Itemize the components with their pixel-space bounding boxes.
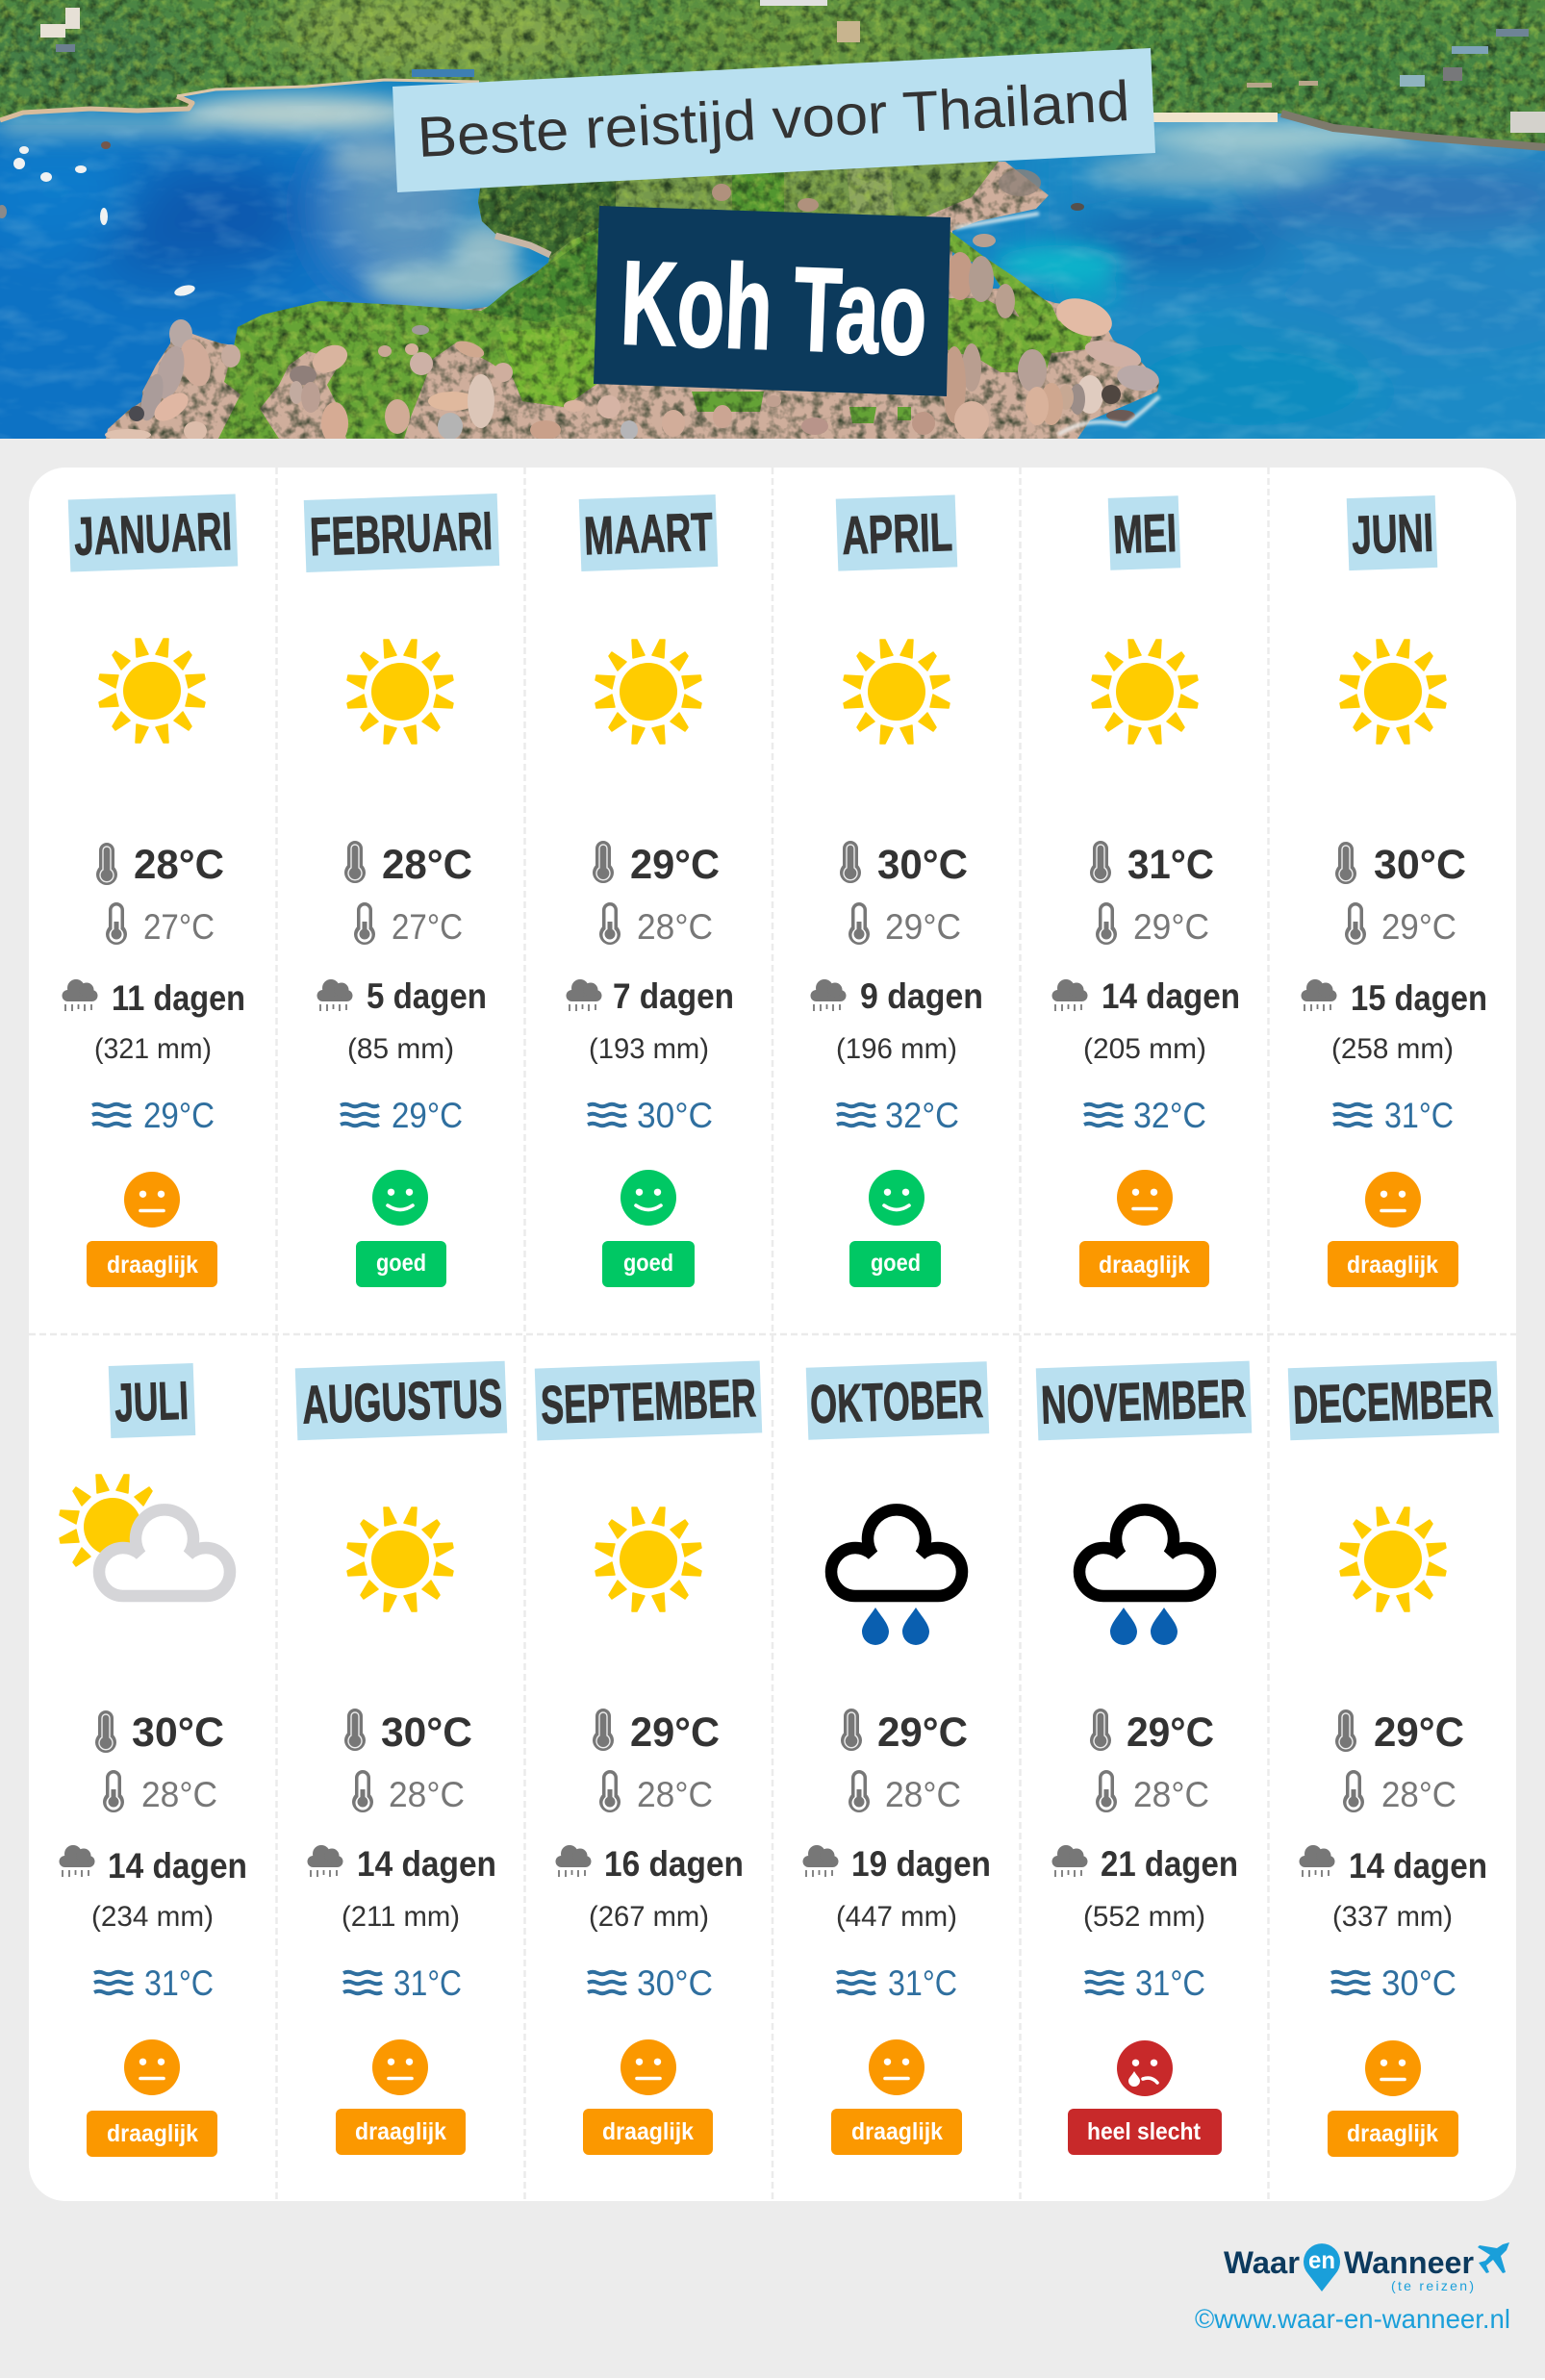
badge xyxy=(1328,1241,1458,1287)
rain days: 14 dagen xyxy=(357,1844,496,1884)
rainfall: (196 mm) xyxy=(836,1033,957,1065)
panel: oktober xyxy=(802,1361,991,2155)
rain days xyxy=(60,1845,247,1886)
high temperature xyxy=(593,1709,720,1756)
high temperature xyxy=(840,841,968,888)
high temperature: 30°C xyxy=(132,1709,224,1756)
smiley xyxy=(1117,1170,1173,1226)
tree texture xyxy=(0,0,1545,439)
rain days xyxy=(802,1844,991,1884)
high temperature xyxy=(1090,1709,1214,1756)
low temperature xyxy=(354,902,463,947)
low temperature: 28°C xyxy=(1133,1775,1209,1814)
rain days xyxy=(556,1844,744,1884)
sea temperature: 32°C xyxy=(885,1096,959,1135)
smiley xyxy=(621,1170,676,1226)
sea temperature xyxy=(1084,1096,1206,1135)
sea temperature: 31°C xyxy=(888,1963,957,2003)
low temperature xyxy=(1096,1770,1209,1814)
smiley xyxy=(124,2039,180,2095)
icon: sun xyxy=(1340,640,1446,744)
low temperature xyxy=(848,902,961,947)
heading: november xyxy=(1036,1361,1252,1440)
low temperature xyxy=(1345,902,1456,947)
sea temperature xyxy=(341,1096,463,1135)
icon: sun xyxy=(347,1507,453,1611)
panel: calendar card xyxy=(29,468,1516,2201)
badge xyxy=(602,1241,695,1287)
rain days xyxy=(1052,1844,1238,1884)
rain days xyxy=(810,976,983,1016)
sea temperature xyxy=(343,1963,462,2003)
heading: oktober: OKTOBER xyxy=(809,1368,984,1434)
smiley xyxy=(1365,2040,1421,2096)
icon: rain cloud xyxy=(831,1509,962,1645)
sea temperature xyxy=(92,1096,215,1135)
panel: november xyxy=(1036,1361,1252,2155)
high temperature: 28°C xyxy=(382,842,472,888)
boulders xyxy=(105,169,1161,444)
badge xyxy=(831,2109,962,2155)
rain days xyxy=(62,978,245,1018)
badge xyxy=(336,2109,466,2155)
sea temperature: 30°C xyxy=(637,1963,713,2003)
badge xyxy=(583,2109,713,2155)
high temperature: 29°C xyxy=(1374,1709,1464,1756)
boats xyxy=(0,141,196,298)
high temperature xyxy=(344,1709,472,1756)
low temperature xyxy=(352,1770,465,1814)
badge: draaglijk xyxy=(602,2118,694,2145)
rain days: 16 dagen xyxy=(604,1844,744,1884)
low temperature: 29°C xyxy=(1381,907,1456,947)
sea temperature xyxy=(837,1096,959,1135)
high temperature: 31°C xyxy=(1127,842,1214,888)
rainfall: (321 mm) xyxy=(94,1033,212,1065)
rain days xyxy=(1052,976,1240,1016)
low temperature xyxy=(848,1770,961,1814)
badge: draaglijk xyxy=(107,1252,198,1279)
sea temperature xyxy=(588,1963,713,2003)
rainfall: (267 mm) xyxy=(589,1901,709,1933)
rain days: 7 dagen xyxy=(613,976,734,1016)
low temperature: 27°C xyxy=(392,907,463,947)
high temperature: 30°C xyxy=(1374,842,1466,888)
high temperature xyxy=(841,1709,968,1756)
rainfall: (85 mm) xyxy=(347,1033,454,1065)
heading: april: APRIL xyxy=(841,501,953,566)
rain days xyxy=(308,1844,496,1884)
rainfall: (447 mm) xyxy=(836,1901,957,1933)
rainfall: (258 mm) xyxy=(1331,1033,1454,1065)
sea temperature: 29°C xyxy=(392,1096,463,1135)
heading: februari: FEBRUARI xyxy=(309,500,494,567)
island rock base xyxy=(106,162,1159,439)
sea temperature: 31°C xyxy=(1135,1963,1205,2003)
rain days: 21 dagen xyxy=(1101,1844,1238,1884)
bottom strip xyxy=(0,2378,1545,2380)
smiley xyxy=(1365,1172,1421,1228)
icon: map pin xyxy=(1304,2243,1340,2291)
sea temperature xyxy=(1333,1096,1454,1135)
icon: sun behind cloud xyxy=(60,1475,230,1596)
panel: mei xyxy=(1052,495,1240,1287)
high temperature xyxy=(96,842,224,888)
panel: maart xyxy=(566,494,734,1287)
panel: juli xyxy=(60,1363,247,2157)
logo: Waar en Wanneer: (te reizen) xyxy=(1391,2278,1474,2293)
rainfall: (205 mm) xyxy=(1083,1033,1206,1065)
smiley xyxy=(124,1172,180,1228)
forest hillside xyxy=(0,0,1545,143)
high temperature: 29°C xyxy=(1127,1709,1214,1756)
icon: sun xyxy=(844,640,950,744)
high temperature xyxy=(593,841,720,888)
badge xyxy=(1328,2111,1458,2157)
heading: maart xyxy=(579,494,718,571)
logo: Waar en Wanneer xyxy=(1224,2242,1509,2293)
heading: augustus xyxy=(295,1361,507,1440)
rain days: 14 dagen xyxy=(1349,1846,1487,1886)
buildings on the hillside xyxy=(40,0,1545,133)
badge: goed xyxy=(376,1250,426,1277)
badge xyxy=(1068,2109,1222,2155)
heading: juni: JUNI xyxy=(1351,502,1434,565)
panel: februari xyxy=(304,494,499,1287)
smiley xyxy=(869,2039,924,2095)
icon: sun xyxy=(595,1507,701,1611)
high temperature: 29°C xyxy=(630,842,720,888)
rain days xyxy=(1301,978,1487,1018)
sea temperature: 29°C xyxy=(143,1096,215,1135)
high temperature: 28°C xyxy=(134,842,224,888)
rain days: 5 dagen xyxy=(367,976,487,1016)
panel: april xyxy=(810,494,983,1287)
heading: januari: JANUARI xyxy=(73,500,233,567)
low temperature: 27°C xyxy=(143,907,215,947)
rain days: 11 dagen xyxy=(112,978,245,1018)
low temperature xyxy=(599,1770,713,1814)
sea temperature: 30°C xyxy=(637,1096,713,1135)
heading: juli xyxy=(109,1363,195,1438)
badge xyxy=(849,1241,941,1287)
rain days xyxy=(1299,1845,1487,1886)
low temperature: 28°C xyxy=(1381,1775,1456,1814)
rain days: 15 dagen xyxy=(1351,978,1487,1018)
smiley xyxy=(869,1170,924,1226)
icon: sun xyxy=(595,640,701,744)
heading: november: NOVEMBER xyxy=(1040,1367,1247,1435)
rainfall: (234 mm) xyxy=(91,1901,214,1933)
banner: subtitle: Beste reistijd voor Thailand xyxy=(416,69,1131,169)
banner: title: Koh Tao xyxy=(619,237,929,381)
hero photo: aerial view of Koh Tao xyxy=(0,0,1545,439)
low temperature xyxy=(599,902,713,947)
smiley xyxy=(372,1170,428,1226)
logo: Waar en Wanneer: en xyxy=(1308,2247,1335,2274)
icon: sun xyxy=(99,639,205,743)
low temperature xyxy=(1096,902,1209,947)
sea temperature: 31°C xyxy=(393,1963,462,2003)
smiley xyxy=(372,2039,428,2095)
sea temperature: 31°C xyxy=(1384,1096,1454,1135)
rain days: 19 dagen xyxy=(851,1844,991,1884)
high temperature: 30°C xyxy=(877,842,968,888)
banner: title xyxy=(594,206,950,396)
high temperature xyxy=(1335,1709,1464,1756)
sea temperature xyxy=(1085,1963,1205,2003)
icon: plane xyxy=(1478,2242,1509,2273)
heading: september xyxy=(535,1360,762,1441)
smiley xyxy=(1117,2040,1173,2096)
low temperature: 28°C xyxy=(141,1775,217,1814)
logo: Waar en Wanneer: Waar xyxy=(1224,2245,1300,2280)
heading: juni xyxy=(1347,495,1437,570)
heading: mei: MEI xyxy=(1112,502,1178,565)
badge: heel slecht xyxy=(1087,2118,1202,2145)
rainfall: (552 mm) xyxy=(1083,1901,1205,1933)
badge: draaglijk xyxy=(1347,2120,1438,2147)
badge: goed xyxy=(623,1250,673,1277)
sea temperature: 31°C xyxy=(144,1963,214,2003)
badge: draaglijk xyxy=(1347,1252,1438,1279)
heading: oktober xyxy=(806,1361,989,1440)
source url: ©www.waar-en-wanneer.nl xyxy=(1195,2304,1510,2334)
low temperature: 28°C xyxy=(637,1775,713,1814)
low temperature xyxy=(106,902,215,947)
logo: Waar en Wanneer: Wanneer xyxy=(1344,2245,1474,2280)
badge: draaglijk xyxy=(851,2118,943,2145)
rain days: 14 dagen xyxy=(108,1846,247,1886)
heading: mei xyxy=(1108,495,1180,570)
panel: juni xyxy=(1301,495,1487,1287)
rain days: 9 dagen xyxy=(860,976,983,1016)
low temperature: 29°C xyxy=(885,907,961,947)
icon: sun xyxy=(1340,1507,1446,1611)
high temperature: 29°C xyxy=(630,1709,720,1756)
icon: sun xyxy=(347,640,453,744)
island vegetation xyxy=(218,159,1092,439)
low temperature: 29°C xyxy=(1133,907,1209,947)
badge: draaglijk xyxy=(1099,1252,1190,1279)
heading: augustus: AUGUSTUS xyxy=(301,1367,503,1435)
heading: september: SEPTEMBER xyxy=(540,1367,757,1435)
icon: sun xyxy=(1092,640,1198,744)
rainfall: (337 mm) xyxy=(1332,1901,1453,1933)
panel: september xyxy=(535,1360,762,2155)
smiley xyxy=(621,2039,676,2095)
rain days xyxy=(317,976,487,1016)
sea temperature xyxy=(1331,1963,1456,2003)
low temperature: 28°C xyxy=(637,907,713,947)
heading: april xyxy=(836,494,957,571)
icon: rain cloud xyxy=(1079,1509,1210,1645)
sea temperature xyxy=(588,1096,713,1135)
surf xyxy=(955,214,1159,435)
high temperature: 30°C xyxy=(381,1709,472,1756)
sea temperature: 30°C xyxy=(1381,1963,1456,2003)
heading: januari xyxy=(68,494,238,572)
badge xyxy=(1079,1241,1209,1287)
panel: januari xyxy=(62,494,245,1287)
high temperature xyxy=(344,841,472,888)
low temperature xyxy=(1343,1770,1456,1814)
banner: subtitle xyxy=(393,48,1155,192)
heading: maart: MAART xyxy=(583,501,714,566)
panel: december xyxy=(1288,1361,1499,2157)
heading: juli: JULI xyxy=(114,1370,190,1432)
low temperature xyxy=(103,1770,217,1814)
badge: draaglijk xyxy=(355,2118,446,2145)
sea temperature xyxy=(837,1963,957,2003)
low temperature: 28°C xyxy=(885,1775,961,1814)
sea temperature xyxy=(94,1963,214,2003)
rainfall: (211 mm) xyxy=(342,1901,460,1933)
high temperature xyxy=(1090,841,1214,888)
badge xyxy=(87,1241,217,1287)
rain days xyxy=(566,976,734,1016)
high temperature: 29°C xyxy=(877,1709,968,1756)
low temperature: 28°C xyxy=(389,1775,465,1814)
rain days: 14 dagen xyxy=(1102,976,1240,1016)
badge xyxy=(87,2111,217,2157)
sea temperature: 32°C xyxy=(1133,1096,1206,1135)
badge xyxy=(356,1241,446,1287)
beaches and shoreline xyxy=(0,80,1545,255)
sea xyxy=(0,81,1545,439)
rainfall: (193 mm) xyxy=(589,1033,709,1065)
heading: februari xyxy=(304,494,499,572)
badge: goed xyxy=(871,1250,921,1277)
panel: augustus xyxy=(295,1361,507,2155)
badge: draaglijk xyxy=(107,2120,198,2147)
